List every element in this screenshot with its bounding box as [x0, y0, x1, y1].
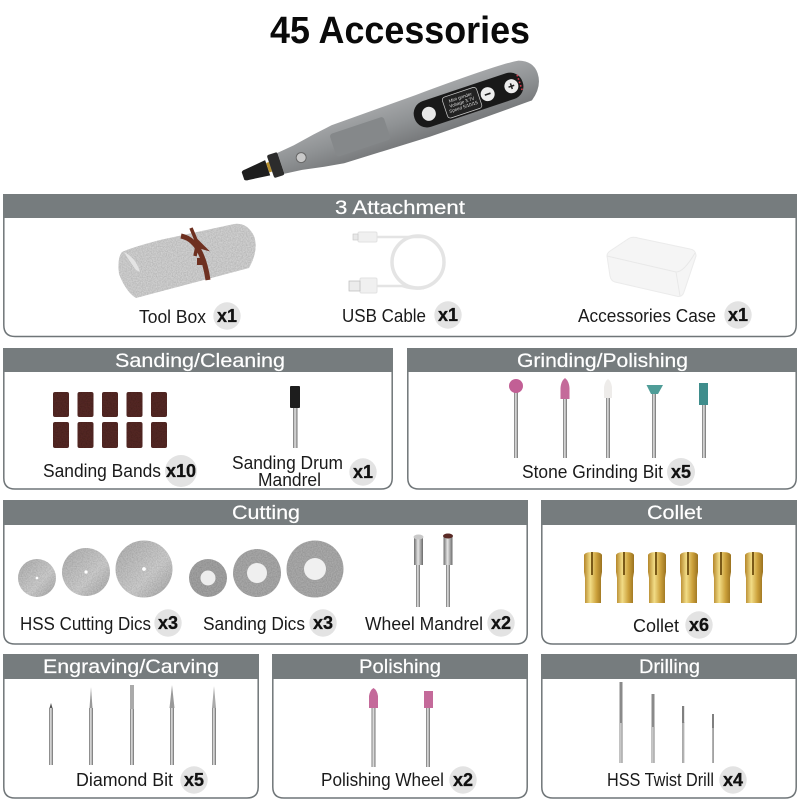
- label: Sanding Drum Mandrel: [232, 453, 343, 490]
- label: Tool Box: Tool Box: [139, 307, 206, 327]
- label: Diamond Bit: Diamond Bit: [76, 770, 173, 790]
- panel: Collet: [541, 500, 797, 644]
- badge: x1: x1: [438, 305, 458, 325]
- label: HSS Cutting Dics: HSS Cutting Dics: [20, 614, 151, 634]
- label: Accessories Case: Accessories Case: [578, 306, 716, 326]
- icon: rotary tool: Mini grinder: [448, 91, 473, 104]
- badge: x1: x1: [728, 305, 748, 325]
- heading: Drilling: Drilling: [639, 656, 700, 678]
- label: Stone Grinding Bit: Stone Grinding Bit: [522, 462, 663, 482]
- label: Collet: Collet: [633, 616, 679, 636]
- panel: Sanding/Cleaning: [3, 348, 393, 490]
- badge: x1: [213, 302, 241, 330]
- badge: x2: [449, 766, 477, 794]
- icon: wheel mandrels: [414, 534, 453, 607]
- label: Sanding Dics: Sanding Dics: [203, 614, 305, 634]
- heading: Cutting: Cutting: [232, 502, 300, 524]
- badge: x2: x2: [491, 613, 511, 633]
- badge: x3: [154, 609, 182, 637]
- badge: x5: x5: [184, 770, 204, 790]
- icon: twist drills: [620, 682, 714, 763]
- heading: Polishing: Polishing: [359, 656, 441, 678]
- badge: x6: [685, 611, 713, 639]
- icon: rotary tool: Voltage 3.7V: [449, 95, 476, 109]
- panel: Cutting: [3, 500, 528, 644]
- panel: Drilling: [541, 654, 797, 798]
- badge: x5: [180, 766, 208, 794]
- icon: tool box pouch: [118, 224, 256, 298]
- title: 45 Accessories: [270, 10, 530, 52]
- icon: diamond bits: [49, 685, 216, 765]
- heading: Grinding/Polishing: Grinding/Polishing: [517, 350, 688, 372]
- label: Sanding Drum Mandrel: Mandrel: [258, 470, 321, 490]
- icon: HSS cutting discs: [18, 540, 172, 598]
- heading: Sanding/Cleaning: Sanding/Cleaning: [115, 350, 285, 372]
- badge: x6: x6: [689, 615, 709, 635]
- badge: x4: [719, 766, 747, 794]
- badge: x10: x10: [166, 461, 196, 481]
- badge: x3: x3: [313, 613, 333, 633]
- badge: x1: [724, 301, 752, 329]
- icon: stone grinding bits: [509, 378, 708, 458]
- heading: Engraving/Carving: Engraving/Carving: [43, 656, 219, 678]
- icon: rotary tool: [236, 55, 546, 197]
- icon: sanding discs: [189, 540, 344, 598]
- panel: Polishing: [272, 654, 528, 798]
- badge: x1: [349, 458, 377, 486]
- badge: x10: [165, 455, 197, 487]
- icon: USB cable: [349, 232, 444, 293]
- badge: x2: [487, 609, 515, 637]
- icon: brass collets: [584, 552, 763, 603]
- label: Wheel Mandrel: Wheel Mandrel: [365, 614, 483, 634]
- label: Sanding Bands: Sanding Bands: [43, 461, 161, 481]
- badge: x4: x4: [723, 770, 743, 790]
- label: USB Cable: USB Cable: [342, 306, 426, 326]
- label: Sanding Drum Mandrel: Sanding Drum: [232, 453, 343, 473]
- panel: Engraving/Carving: [3, 654, 259, 798]
- panel: Grinding/Polishing: [407, 348, 797, 489]
- badge: x2: x2: [453, 770, 473, 790]
- heading: 3 Attachment: 3 Attachment: [335, 197, 466, 219]
- badge: x5: x5: [671, 462, 691, 482]
- icon: sanding bands: [53, 392, 167, 448]
- badge: x1: [434, 301, 462, 329]
- badge: x5: [667, 458, 695, 486]
- badge: x1: x1: [353, 462, 373, 482]
- icon: sanding drum mandrel: [290, 386, 300, 448]
- icon: rotary tool: Speed 5/10/15: [449, 100, 479, 114]
- label: HSS Twist Drill: HSS Twist Drill: [607, 770, 714, 790]
- badge: x3: x3: [158, 613, 178, 633]
- badge: x1: x1: [217, 306, 237, 326]
- label: Polishing Wheel: Polishing Wheel: [321, 770, 444, 790]
- badge: x3: [309, 609, 337, 637]
- icon: accessories case: [607, 237, 696, 296]
- panel: 3 Attachment: [3, 194, 797, 336]
- heading: Collet: Collet: [647, 502, 703, 524]
- icon: polishing wheels: [369, 688, 433, 767]
